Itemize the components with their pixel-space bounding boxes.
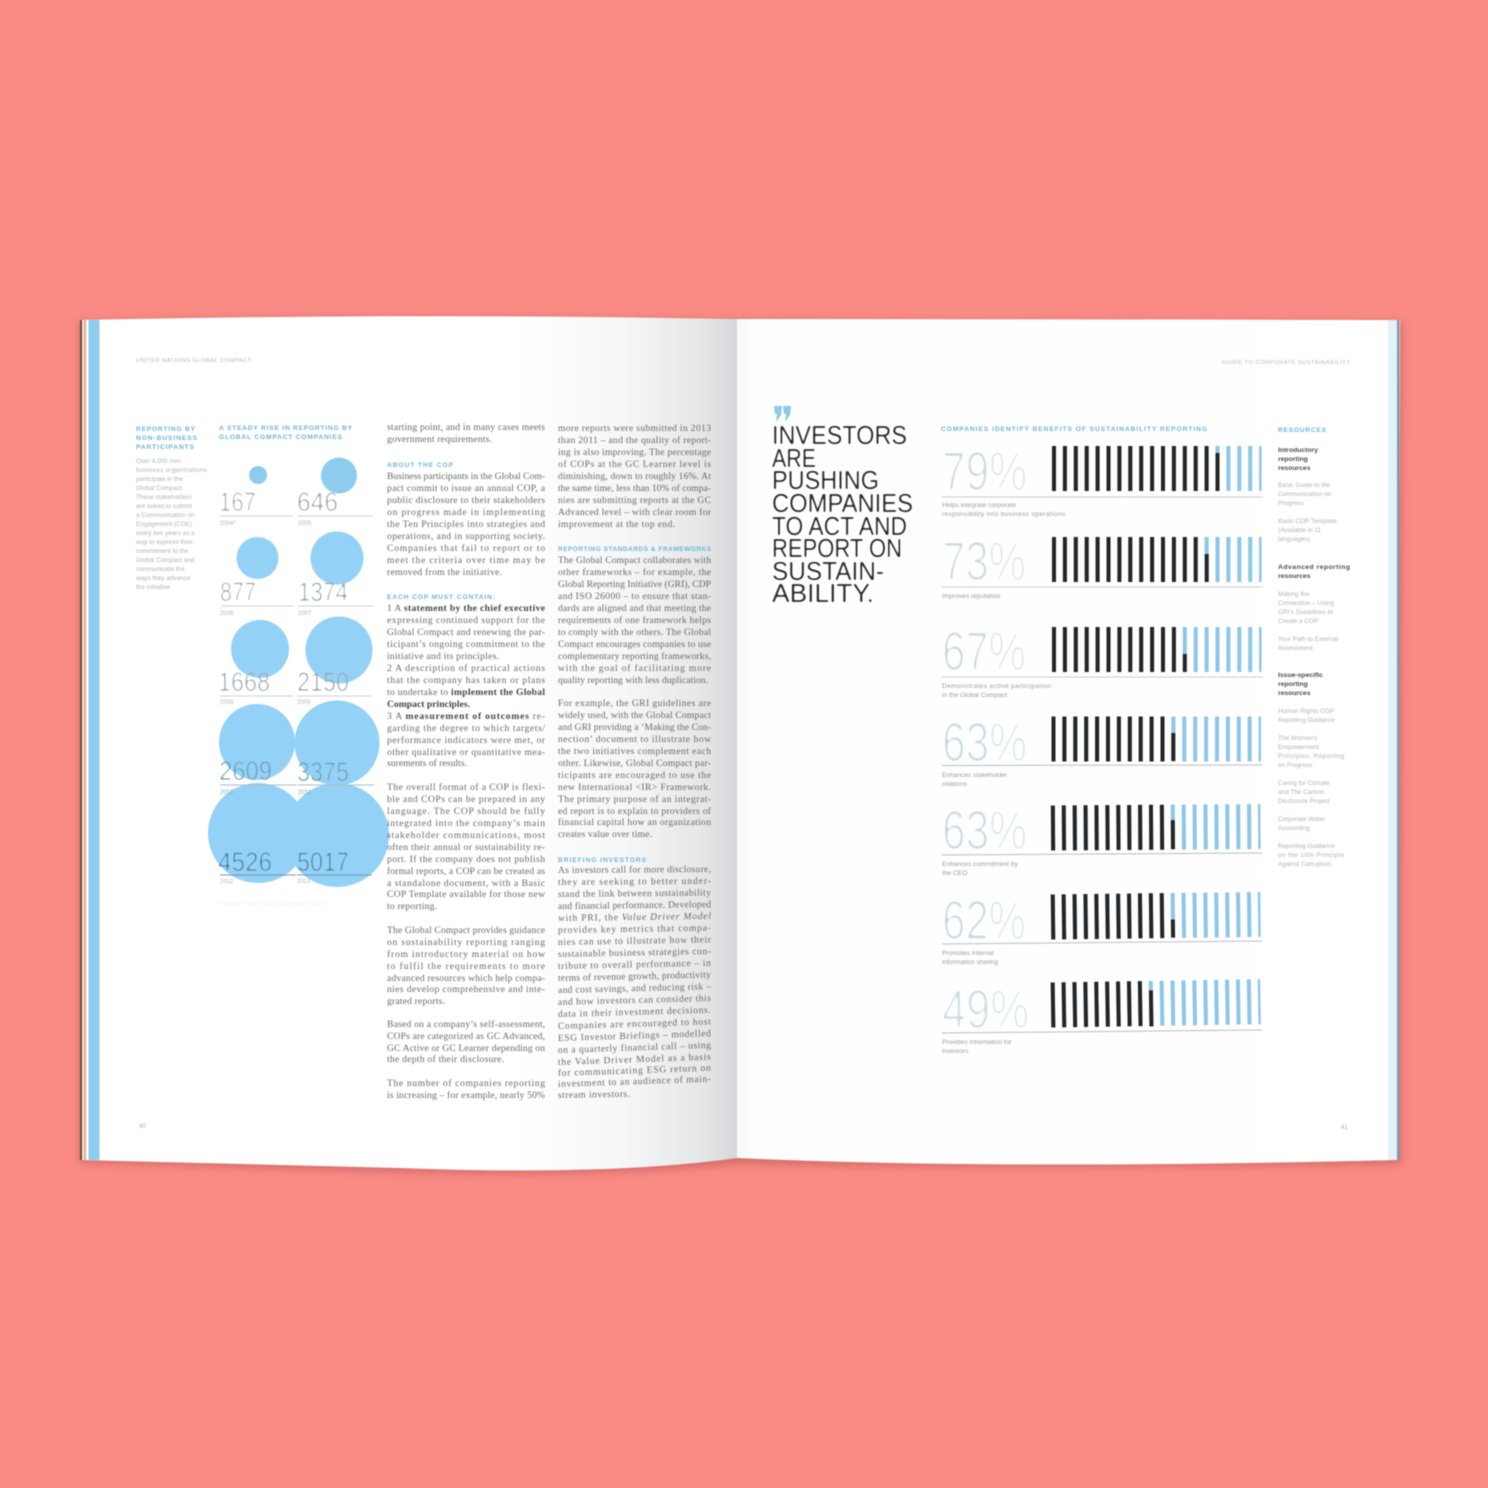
sidebar: resources: Connection – Using xyxy=(1278,600,1334,607)
body text: column one: Companies that fail to report or to xyxy=(387,543,545,554)
sidebar: resources: Empowerment xyxy=(1278,744,1319,751)
sidebar: reporting by non-business participants: participate in the xyxy=(136,476,183,483)
sidebar: reporting by non-business participants: a Communication on xyxy=(136,512,195,519)
sidebar: reporting by non-business participants: Engagement (COE) xyxy=(136,521,192,528)
body text: column one: the depth of their disclosure. xyxy=(387,1054,504,1065)
body text: column two: quality reporting with less duplication. xyxy=(558,675,708,686)
sidebar: reporting by non-business participants: are asked to submit xyxy=(136,503,192,510)
body text: column two: Global Reporting Initiative (GRI), CDP xyxy=(558,579,711,590)
sidebar: resources xyxy=(1278,427,1350,868)
bubble chart: COP reporting by year: 2012 xyxy=(220,879,234,885)
sidebar: resources: Caring for Climate xyxy=(1278,780,1330,787)
bubble chart: COP reporting by year: 2609 xyxy=(219,756,272,786)
sidebar: resources: and The Carbon xyxy=(1278,789,1325,796)
body text: column one xyxy=(387,422,546,1101)
bubble chart: COP reporting by year: 2005 xyxy=(298,521,312,527)
sidebar: resources: Against Corruption xyxy=(1278,861,1331,868)
heading: steady rise xyxy=(219,425,353,441)
body text: column one: The number of companies reporting xyxy=(387,1078,545,1089)
body text: column two: BRIEFING INVESTORS xyxy=(558,857,647,864)
sidebar: resources: Human Rights COP xyxy=(1278,708,1334,715)
body text: column two: sustainable business strategies con- xyxy=(558,946,711,960)
body text: column two: to comply with the others. The Global xyxy=(558,627,711,638)
sidebar: reporting by non-business participants: commitment to the xyxy=(136,548,189,555)
body text: column two: terms of revenue growth, productivity xyxy=(558,970,711,984)
bubble chart: COP reporting by year: 2013 xyxy=(297,879,311,885)
body text: column one: surements of results. xyxy=(387,758,467,769)
sidebar: resources: Your Path to External xyxy=(1278,636,1338,643)
chart row: 63% commitment by CEO: 63% xyxy=(942,799,1027,861)
bubble chart: COP reporting by year: 2007 xyxy=(298,611,312,617)
bubble chart: COP reporting by year: 167 xyxy=(219,487,256,517)
body text: column two: on a quarterly financial call – using xyxy=(558,1040,711,1056)
body text: column two: with PRI, the Value Driver Model xyxy=(558,911,711,924)
body text: column two: more reports were submitted in 2013 xyxy=(558,423,711,434)
body text: column one: The overall format of a COP is flexi- xyxy=(387,782,545,793)
heading: steady rise: GLOBAL COMPACT COMPANIES xyxy=(219,434,343,441)
sidebar: resources: on Progress xyxy=(1278,762,1312,769)
body text: column one: operations, and in supporting society. xyxy=(387,531,545,542)
sidebar: resources: Reporting Guidance xyxy=(1278,843,1335,850)
sidebar: reporting by non-business participants: Over 4,000 non- xyxy=(136,458,182,465)
pull quote title: ABILITY. xyxy=(772,580,874,608)
body text: column one: garding the degree to which targets/ xyxy=(387,723,545,734)
body text: column one: other qualitative or quantitative mea- xyxy=(387,747,545,758)
pull quote title: INVESTORS xyxy=(772,422,907,450)
body text: column one: on sustainability reporting ranging xyxy=(387,937,545,948)
body text: column two: of COPs at the GC Learner level is xyxy=(558,459,711,470)
chart row: 79%: Helps integrate corporate xyxy=(942,502,1016,509)
body text: column one: language. The COP should be fully xyxy=(387,806,545,817)
body text: column one: on progress made in implementing xyxy=(387,507,545,518)
sidebar: reporting by non-business participants: NON-BUSINESS xyxy=(136,435,198,442)
body text: column one: expressing continued support for the xyxy=(387,615,545,626)
body text: column one: 1 A statement by the chief executive xyxy=(387,603,546,614)
pull quote title: PUSHING xyxy=(772,467,879,495)
body text: column one: nies develop comprehensive and inte- xyxy=(387,984,545,995)
body text: column two: nection’ document to illustrate how xyxy=(558,734,711,745)
sidebar: reporting by non-business participants: REPORTING BY xyxy=(136,426,196,433)
body text: column two: the same time, less than 10% of compa- xyxy=(558,483,711,494)
body text: column two: dards are aligned and that meeting the xyxy=(558,603,711,614)
pull quote title: SUSTAIN- xyxy=(772,558,884,586)
body text: column two: and cost savings, and reducing risk – xyxy=(558,981,711,996)
body text: column two: nies can use to illustrate how their xyxy=(558,934,712,948)
body text: column two: the Value Driver Model as a basis xyxy=(558,1052,711,1068)
sidebar: resources: Introductory xyxy=(1278,447,1318,454)
chart row: 63% stakeholder relations: 63% xyxy=(942,711,1027,773)
body text: column two xyxy=(558,423,712,1101)
body text: column two: complementary reporting frameworks, xyxy=(558,651,711,662)
chart footnote: *Source: UN Global Compact, 2013 xyxy=(220,901,325,907)
body text: column one: public disclosure to their stakeholders xyxy=(387,495,545,506)
chart row: 79%: 79% xyxy=(942,440,1027,502)
page number left: 40 xyxy=(139,1124,146,1130)
body text: column one: COP Template available for those new xyxy=(387,889,545,900)
body text: column two: ed report is to explain to providers of xyxy=(558,806,712,817)
body text: column one: government requirements. xyxy=(387,434,492,445)
chart row: 49%: Provides information for xyxy=(942,1039,1012,1046)
body text: column two: data in their investment decisions. xyxy=(558,1005,711,1020)
body text: column one: grated reports. xyxy=(387,996,445,1007)
bubble chart: COP reporting by year: 2010 xyxy=(220,790,234,796)
chart row: 62% xyxy=(942,889,1262,966)
bubble chart: COP reporting by year: 646 xyxy=(297,487,338,517)
sidebar: reporting by non-business participants: PARTICIPANTS xyxy=(136,444,195,451)
body text: column two: stream investors. xyxy=(558,1089,630,1101)
sidebar: resources: Basic COP Template xyxy=(1278,518,1337,525)
body text: column one: ble and COPs can be prepared in any xyxy=(387,794,545,805)
chart row: 79% xyxy=(942,440,1263,518)
body text: column two: improvement at the top end. xyxy=(558,519,675,530)
chart row: 62%: 62% xyxy=(942,889,1026,951)
sidebar: resources: Communication on xyxy=(1278,491,1332,498)
body text: column two: and GRI providing a ‘Making the Con- xyxy=(558,722,711,733)
chart row: 63% commitment by CEO: Enhances commitment by xyxy=(942,861,1019,868)
sidebar: reporting by non-business participants: every two years as a xyxy=(136,530,195,537)
body text: column two: diminishing, down to roughly 16%. At xyxy=(558,471,711,482)
chart row: 63% commitment by CEO xyxy=(942,799,1262,877)
chart row: 62%: information sharing xyxy=(942,959,998,966)
body text: column two: ing is also improving. The percentage xyxy=(558,447,711,458)
sidebar: reporting by non-business participants: ways they advance xyxy=(135,575,191,582)
bubble chart: COP reporting by year: 2011 xyxy=(298,790,312,796)
body text: column two: Companies are encouraged to host xyxy=(558,1016,711,1032)
sidebar: reporting by non-business participants: way to express their xyxy=(135,539,194,546)
body text: column two: ticipants are encouraged to use the xyxy=(558,770,711,781)
body text: column one: from introductory material on how xyxy=(387,949,545,960)
sidebar: resources: Accounting xyxy=(1278,825,1310,832)
body text: column two: Advanced level – with clear room for xyxy=(558,507,712,518)
sidebar: resources: Disclosure Project xyxy=(1278,798,1330,805)
sidebar: resources: resources xyxy=(1278,690,1311,697)
body text: column two: widely used, with the Global Compact xyxy=(558,710,711,721)
bubble chart: COP reporting by year: 877 xyxy=(220,577,256,607)
body text: column two: for communicating ESG return on xyxy=(558,1063,711,1079)
chart row: 73%: 73% xyxy=(942,530,1026,592)
body text: column one: to fulfil the requirements to more xyxy=(387,961,545,972)
body text: column one: Global Compact and renewing the par- xyxy=(387,627,545,638)
body text: column one: removed from the initiative. xyxy=(387,567,502,578)
body text: column two: investment to an audience of main- xyxy=(558,1074,711,1090)
body text: column one: stakeholder communications, most xyxy=(387,830,545,841)
sidebar: reporting by non-business participants: Global Compact. xyxy=(136,485,184,492)
body text: column one: ABOUT THE COP xyxy=(387,462,454,469)
body text: column two: provides key metrics that compa- xyxy=(558,923,711,936)
sidebar: reporting by non-business participants: the initiative. xyxy=(136,584,172,591)
chart row: 67%: Demonstrates active participation xyxy=(942,683,1051,690)
running header left: UNITED NATIONS GLOBAL COMPACT xyxy=(136,358,251,364)
body text: column two: the two initiatives complement each xyxy=(558,746,711,757)
chart row: 67%: 67% xyxy=(942,620,1026,682)
sidebar: reporting by non-business participants: Global Compact and xyxy=(136,557,195,564)
heading: steady rise: A STEADY RISE IN REPORTING BY xyxy=(219,425,353,432)
body text: column one: The Global Compact provides guidance xyxy=(387,925,545,936)
sidebar: resources: Issue-specific xyxy=(1278,672,1323,679)
body text: column one: formal reports, a COP can be created as xyxy=(387,866,545,877)
chart row: 79%: responsibility into business operations xyxy=(942,511,1066,518)
body text: column two: requirements of one framework helps xyxy=(558,615,711,626)
body text: column one: 2 A description of practical actions xyxy=(387,663,545,674)
body text: column one: ticipant’s ongoing commitment to the xyxy=(387,639,545,650)
body text: column one: performance indicators were met, or xyxy=(387,735,546,746)
body text: column one: integrated into the company’s main xyxy=(387,818,545,829)
sidebar: resources: Advanced reporting xyxy=(1278,564,1350,571)
body text: column one: to undertake to implement the Global xyxy=(387,687,545,698)
body text: column two: and how investors can consider this xyxy=(558,993,711,1008)
body text: column one: GC Active or GC Learner depending on xyxy=(387,1043,545,1054)
sidebar: resources: Reporting Guidance xyxy=(1278,717,1335,724)
body text: column one: is increasing – for example, nearly 50% xyxy=(387,1090,545,1101)
body text: column two: financial capital how an organization xyxy=(558,817,711,828)
sidebar: resources: GRI’s Guidelines to xyxy=(1278,609,1333,616)
body text: column one: port. If the company does not publish xyxy=(387,854,545,865)
body text: column one: starting point, and in many cases meets xyxy=(387,422,545,433)
body text: column two: and financial performance. Developed xyxy=(558,899,711,912)
sidebar: resources: reporting xyxy=(1278,456,1308,463)
body text: column one: pact commit to issue an annual COP, a xyxy=(387,483,546,494)
chart row: 67% xyxy=(942,620,1263,699)
magazine shadow xyxy=(80,318,1402,1174)
body text: column one: meet the criteria over time may be xyxy=(387,555,545,566)
running header right: GUIDE TO CORPORATE SUSTAINABILITY xyxy=(1222,360,1350,366)
body text: column two: new International <IR> Framework. xyxy=(558,782,711,793)
body text: column one: Business participants in the Global Com- xyxy=(387,471,545,482)
chart row: 63% stakeholder relations xyxy=(942,711,1262,788)
body text: column two: The primary purpose of an integrat- xyxy=(558,794,711,805)
sidebar: resources: RESOURCES xyxy=(1278,427,1327,434)
body text: column one: EACH COP MUST CONTAIN: xyxy=(387,594,495,601)
body text: column one: a standalone document, with a Basic xyxy=(387,878,545,889)
sidebar: resources: Making the xyxy=(1278,591,1310,598)
sidebar: resources: (Available in 11 xyxy=(1278,527,1322,534)
bubble chart: COP reporting by year: 5017 xyxy=(297,847,349,877)
bubble chart: COP reporting by year: 2008 xyxy=(220,700,234,706)
bubble chart: COP reporting by year: 2004* xyxy=(220,521,236,527)
body text: column two: other frameworks – for example, the xyxy=(558,567,711,578)
body text: column two: they are seeking to better under- xyxy=(558,876,711,888)
sidebar: resources: Principles: Reporting xyxy=(1278,753,1344,760)
body text: column one: the Ten Principles into strategies and xyxy=(387,519,545,530)
body text: column two: other. Likewise, Global Compact par- xyxy=(558,758,711,769)
body text: column one: Compact principles. xyxy=(387,699,470,710)
icon: quotation mark xyxy=(774,406,791,422)
body text: column one: Based on a company’s self-assessment, xyxy=(387,1019,545,1030)
chart row: 49%: 49% xyxy=(942,978,1029,1040)
body text: column two: For example, the GRI guidelines are xyxy=(558,698,711,709)
chart row: 63% commitment by CEO: the CEO xyxy=(942,870,967,877)
bubble chart: COP reporting by year: 2006 xyxy=(220,611,234,617)
sidebar: reporting by non-business participants: These stakeholders xyxy=(136,494,192,501)
sidebar: resources: resources xyxy=(1278,465,1311,472)
sidebar: resources: Create a COP xyxy=(1278,618,1318,625)
sidebar: resources: Progress xyxy=(1278,500,1304,507)
chart row: 63% stakeholder relations: Enhances stakeholder xyxy=(942,772,1008,779)
bubble chart: COP reporting by year: 4526 xyxy=(218,847,272,877)
body text: column two: ESG Investor Briefings – modelled xyxy=(558,1028,711,1044)
body text: column one: often their annual or sustainability re- xyxy=(387,842,545,853)
body text: column one: COPs are categorized as GC Advanced, xyxy=(387,1031,545,1042)
bubble chart: COP reporting by year: 2150 xyxy=(297,667,349,697)
sidebar: reporting by non-business participants: communicate the xyxy=(136,566,185,573)
bubble chart: COP reporting by year: 2009 xyxy=(297,700,311,706)
chart row: 67%: in the Global Compact xyxy=(942,692,1007,699)
pull quote title xyxy=(772,422,913,608)
body text: column two: nies are submitting reports at the GC xyxy=(558,495,711,506)
page number right: 41 xyxy=(1341,1125,1348,1131)
sidebar: resources: Assessment xyxy=(1278,645,1313,652)
body text: column two: with the goal of facilitating more xyxy=(558,663,711,674)
chart row: 63% stakeholder relations: relations xyxy=(942,781,968,788)
body text: column one: to reporting. xyxy=(387,901,437,912)
panel: left page xyxy=(80,316,737,1170)
pull quote title: REPORT ON xyxy=(772,535,902,563)
pull quote title: TO ACT AND xyxy=(772,513,907,541)
chart row: 49% xyxy=(942,978,1262,1055)
panel: right page xyxy=(737,319,1400,1165)
sidebar: resources: Basic Guide to the xyxy=(1278,482,1331,489)
sidebar: resources: Corporate Water xyxy=(1278,816,1326,823)
body text: column two: than 2011 – and the quality of report- xyxy=(558,435,711,446)
body text: column two: and ISO 26000 – to ensure that stan- xyxy=(558,591,711,602)
bubble chart: COP reporting by year: 3375 xyxy=(297,757,349,787)
pull quote title: ARE xyxy=(772,445,816,473)
body text: column two: Compact encourages companies to use xyxy=(558,639,711,650)
sidebar: resources: resources xyxy=(1278,573,1311,580)
body text: column two: REPORTING STANDARDS & FRAMEWORKS xyxy=(558,546,712,553)
chart row: 73% xyxy=(942,530,1263,600)
body text: column one: advanced resources which help compa- xyxy=(387,973,545,984)
body text: column one: initiative and its principles. xyxy=(387,651,499,662)
pull quote title: COMPANIES xyxy=(772,490,913,518)
bubble chart: COP reporting by year: 1374 xyxy=(298,577,348,607)
chart row: 73%: Improves reputation xyxy=(942,593,1001,600)
body text: column two: creates value over time. xyxy=(558,829,652,840)
sidebar: resources: languages) xyxy=(1278,536,1310,543)
sidebar: resources: reporting xyxy=(1278,681,1308,688)
body text: column one: that the company has taken or plans xyxy=(387,675,545,686)
bubble chart: COP reporting by year: 1668 xyxy=(218,667,270,697)
chart row: 62%: Promotes internal xyxy=(942,950,994,957)
sidebar: resources: on the 10th Principle xyxy=(1278,852,1344,859)
sidebar: reporting by non-business participants xyxy=(135,426,207,591)
body text: column two: The Global Compact collaborates with xyxy=(558,555,711,566)
heading: companies identify benefits: COMPANIES IDENTIFY BENEFITS OF SUSTAINABILITY REPORTING xyxy=(941,426,1208,433)
body text: column two: tribute to overall performance – in xyxy=(558,958,711,972)
body text: column one: 3 A measurement of outcomes re- xyxy=(387,711,545,722)
body text: column two: stand the link between sustainability xyxy=(558,887,711,900)
bubble chart: COP reporting by year xyxy=(208,458,389,887)
sidebar: reporting by non-business participants: business organizations xyxy=(136,467,207,474)
body text: column two: As investors call for more disclosure, xyxy=(558,864,711,876)
sidebar: resources: The Women’s xyxy=(1278,735,1317,742)
chart row: 49%: investors xyxy=(942,1048,969,1055)
